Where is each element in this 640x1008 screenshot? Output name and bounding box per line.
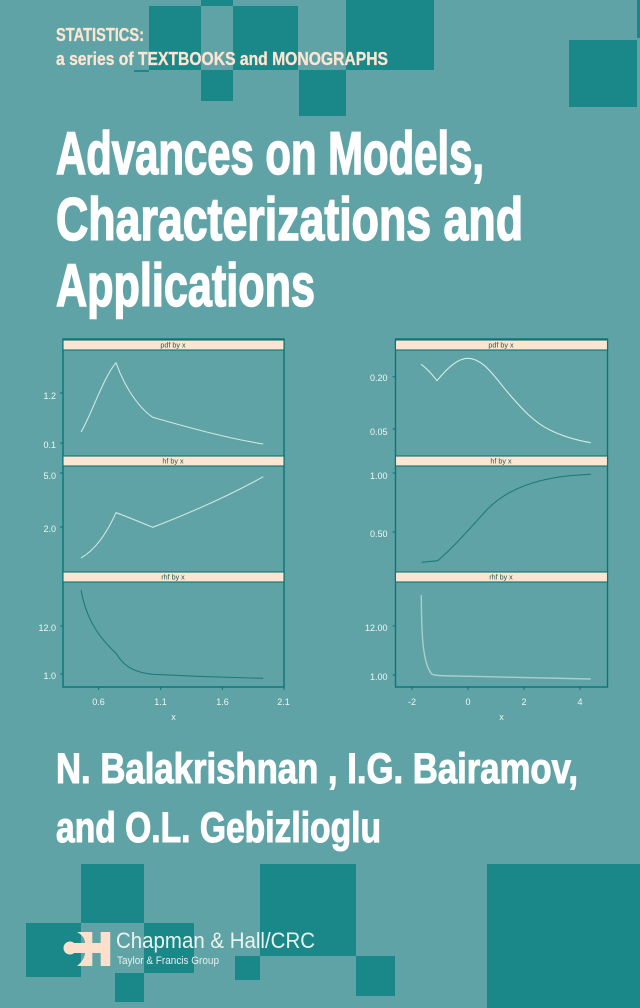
right chart: strip hf by x: [396, 456, 608, 466]
left chart: axis labels: 0.6: [92, 697, 105, 707]
left chart: strip pdf by x: [63, 340, 284, 350]
publisher name: Chapman & Hall/CRC: [116, 928, 315, 953]
left chart: pdf curve: [81, 363, 263, 444]
left chart: strip hf by x: hf by x: [162, 456, 184, 466]
left chart: strip pdf by x: pdf by x: [160, 340, 186, 350]
left chart: strip rhf by x: rhf by x: [161, 572, 185, 582]
left chart: axis labels: 1.0: [43, 671, 56, 681]
title: Applications: [56, 252, 315, 319]
left chart: frame: [63, 339, 284, 687]
left chart: hf curve: [81, 477, 263, 558]
right chart: axis labels: 2: [521, 697, 527, 707]
left chart: axis labels: 12.0: [38, 623, 56, 633]
publisher logo: CH mark: [64, 932, 110, 966]
right chart: rhf curve: [421, 595, 591, 679]
right chart: axis labels: 1.00: [370, 672, 388, 682]
right chart: axis labels: 0.05: [370, 427, 388, 437]
left chart: axis labels: 1.2: [43, 391, 56, 401]
right chart: axis labels: -2: [408, 697, 416, 707]
title: [56, 120, 523, 319]
left chart: axis labels: 2.1: [277, 697, 290, 707]
right chart panel: [365, 339, 608, 722]
right chart: strip rhf by x: rhf by x: [489, 572, 513, 582]
left chart: axis ticks: [60, 393, 284, 690]
top decorative squares: [134, 0, 640, 116]
right chart: axis labels: 0.20: [370, 373, 388, 383]
left chart: axis labels: 5.0: [43, 471, 56, 481]
right chart: axis labels: 0: [465, 697, 471, 707]
series heading: a series of TEXTBOOKS and MONOGRAPHS: [56, 48, 388, 69]
right chart: hf curve: [422, 474, 591, 562]
series heading: STATISTICS:: [56, 24, 144, 45]
left chart: axis labels: 1.1: [154, 697, 167, 707]
right chart: strip pdf by x: pdf by x: [488, 340, 514, 350]
left chart: axis labels: 2.0: [43, 524, 56, 534]
left chart: strip hf by x: [63, 456, 284, 466]
right chart: frame: [396, 339, 608, 687]
right chart: axis labels: 12.00: [365, 623, 388, 633]
right chart: pdf curve: [421, 358, 591, 443]
left chart: axis labels: x: [171, 712, 176, 722]
left chart: axis labels: [38, 391, 290, 722]
right chart: axis labels: [365, 373, 583, 722]
authors: and O.L. Gebizlioglu: [56, 804, 381, 852]
right chart: axis labels: x: [499, 712, 504, 722]
right chart: strip hf by x: hf by x: [490, 456, 512, 466]
right chart: strip pdf by x: [396, 340, 608, 350]
left chart panel: [38, 339, 290, 722]
left chart: rhf curve: [81, 590, 263, 678]
left chart: axis labels: 1.6: [216, 697, 229, 707]
right chart: axis ticks: [392, 377, 580, 690]
right chart: axis labels: 0.50: [370, 529, 388, 539]
right chart: axis labels: 4: [577, 697, 583, 707]
series heading: [56, 24, 388, 69]
left chart: strip rhf by x: [63, 572, 284, 582]
left chart: axis labels: 0.1: [43, 440, 56, 450]
right chart: axis labels: 1.00: [370, 471, 388, 481]
bottom decorative squares: [26, 864, 640, 1008]
authors: [56, 745, 578, 852]
right chart: strip rhf by x: [396, 572, 608, 582]
publisher group: Taylor & Francis Group: [117, 955, 219, 967]
